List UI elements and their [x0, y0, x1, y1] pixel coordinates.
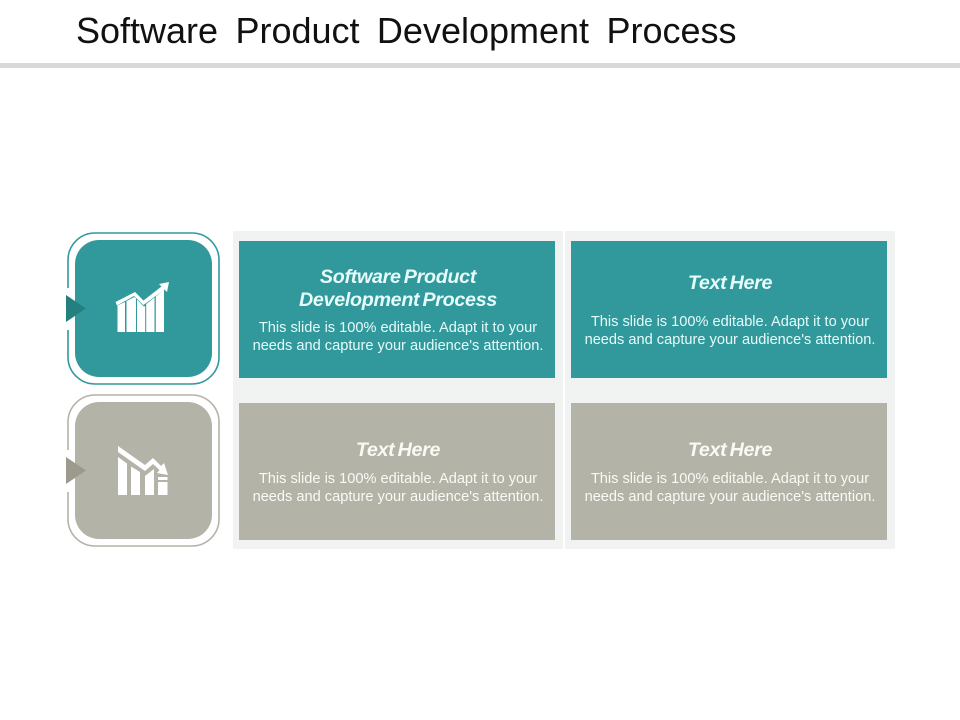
inner tile: [75, 240, 212, 377]
outer frame: [68, 233, 219, 384]
frame gap: [64, 450, 72, 492]
panel: top left card: [239, 241, 555, 378]
heading: [299, 266, 497, 311]
heading: Text Here: [688, 272, 772, 294]
heading: Text Here: [356, 439, 440, 461]
icon: falling chart: [118, 446, 168, 495]
icon: rising chart: [116, 282, 169, 332]
icon panel: growth: [66, 232, 220, 385]
heading: Software Product: [320, 266, 476, 288]
text block: This slide is 100% editable. Adapt it to your: [591, 314, 869, 330]
text block: needs and capture your audience's attention.: [585, 332, 875, 348]
text block: This slide is 100% editable. Adapt it to your: [591, 471, 869, 487]
text block: needs and capture your audience's attention.: [253, 489, 543, 505]
icon panel: decline: [66, 394, 220, 547]
text block: [585, 314, 875, 348]
text block: This slide is 100% editable. Adapt it to your: [259, 320, 537, 336]
text block: [585, 471, 875, 505]
text block: [253, 320, 543, 354]
frame gap: [64, 288, 72, 330]
title rule: [0, 63, 960, 68]
text block: This slide is 100% editable. Adapt it to your: [259, 471, 537, 487]
inner tile: [75, 402, 212, 539]
panel: top right card: [571, 241, 887, 378]
heading: Text Here: [688, 439, 772, 461]
text block: [253, 471, 543, 505]
heading: Development Process: [299, 289, 497, 311]
panel: bottom right card: [571, 403, 887, 540]
panel: card background: [233, 231, 895, 549]
outer frame: [68, 395, 219, 546]
panel divider: [563, 231, 565, 549]
text block: needs and capture your audience's attention.: [253, 338, 543, 354]
panel: bottom left card: [239, 403, 555, 540]
text block: needs and capture your audience's attention.: [585, 489, 875, 505]
title: Software Product Development Process: [76, 10, 736, 51]
arrow marker: [66, 457, 86, 484]
arrow marker: [66, 295, 86, 322]
